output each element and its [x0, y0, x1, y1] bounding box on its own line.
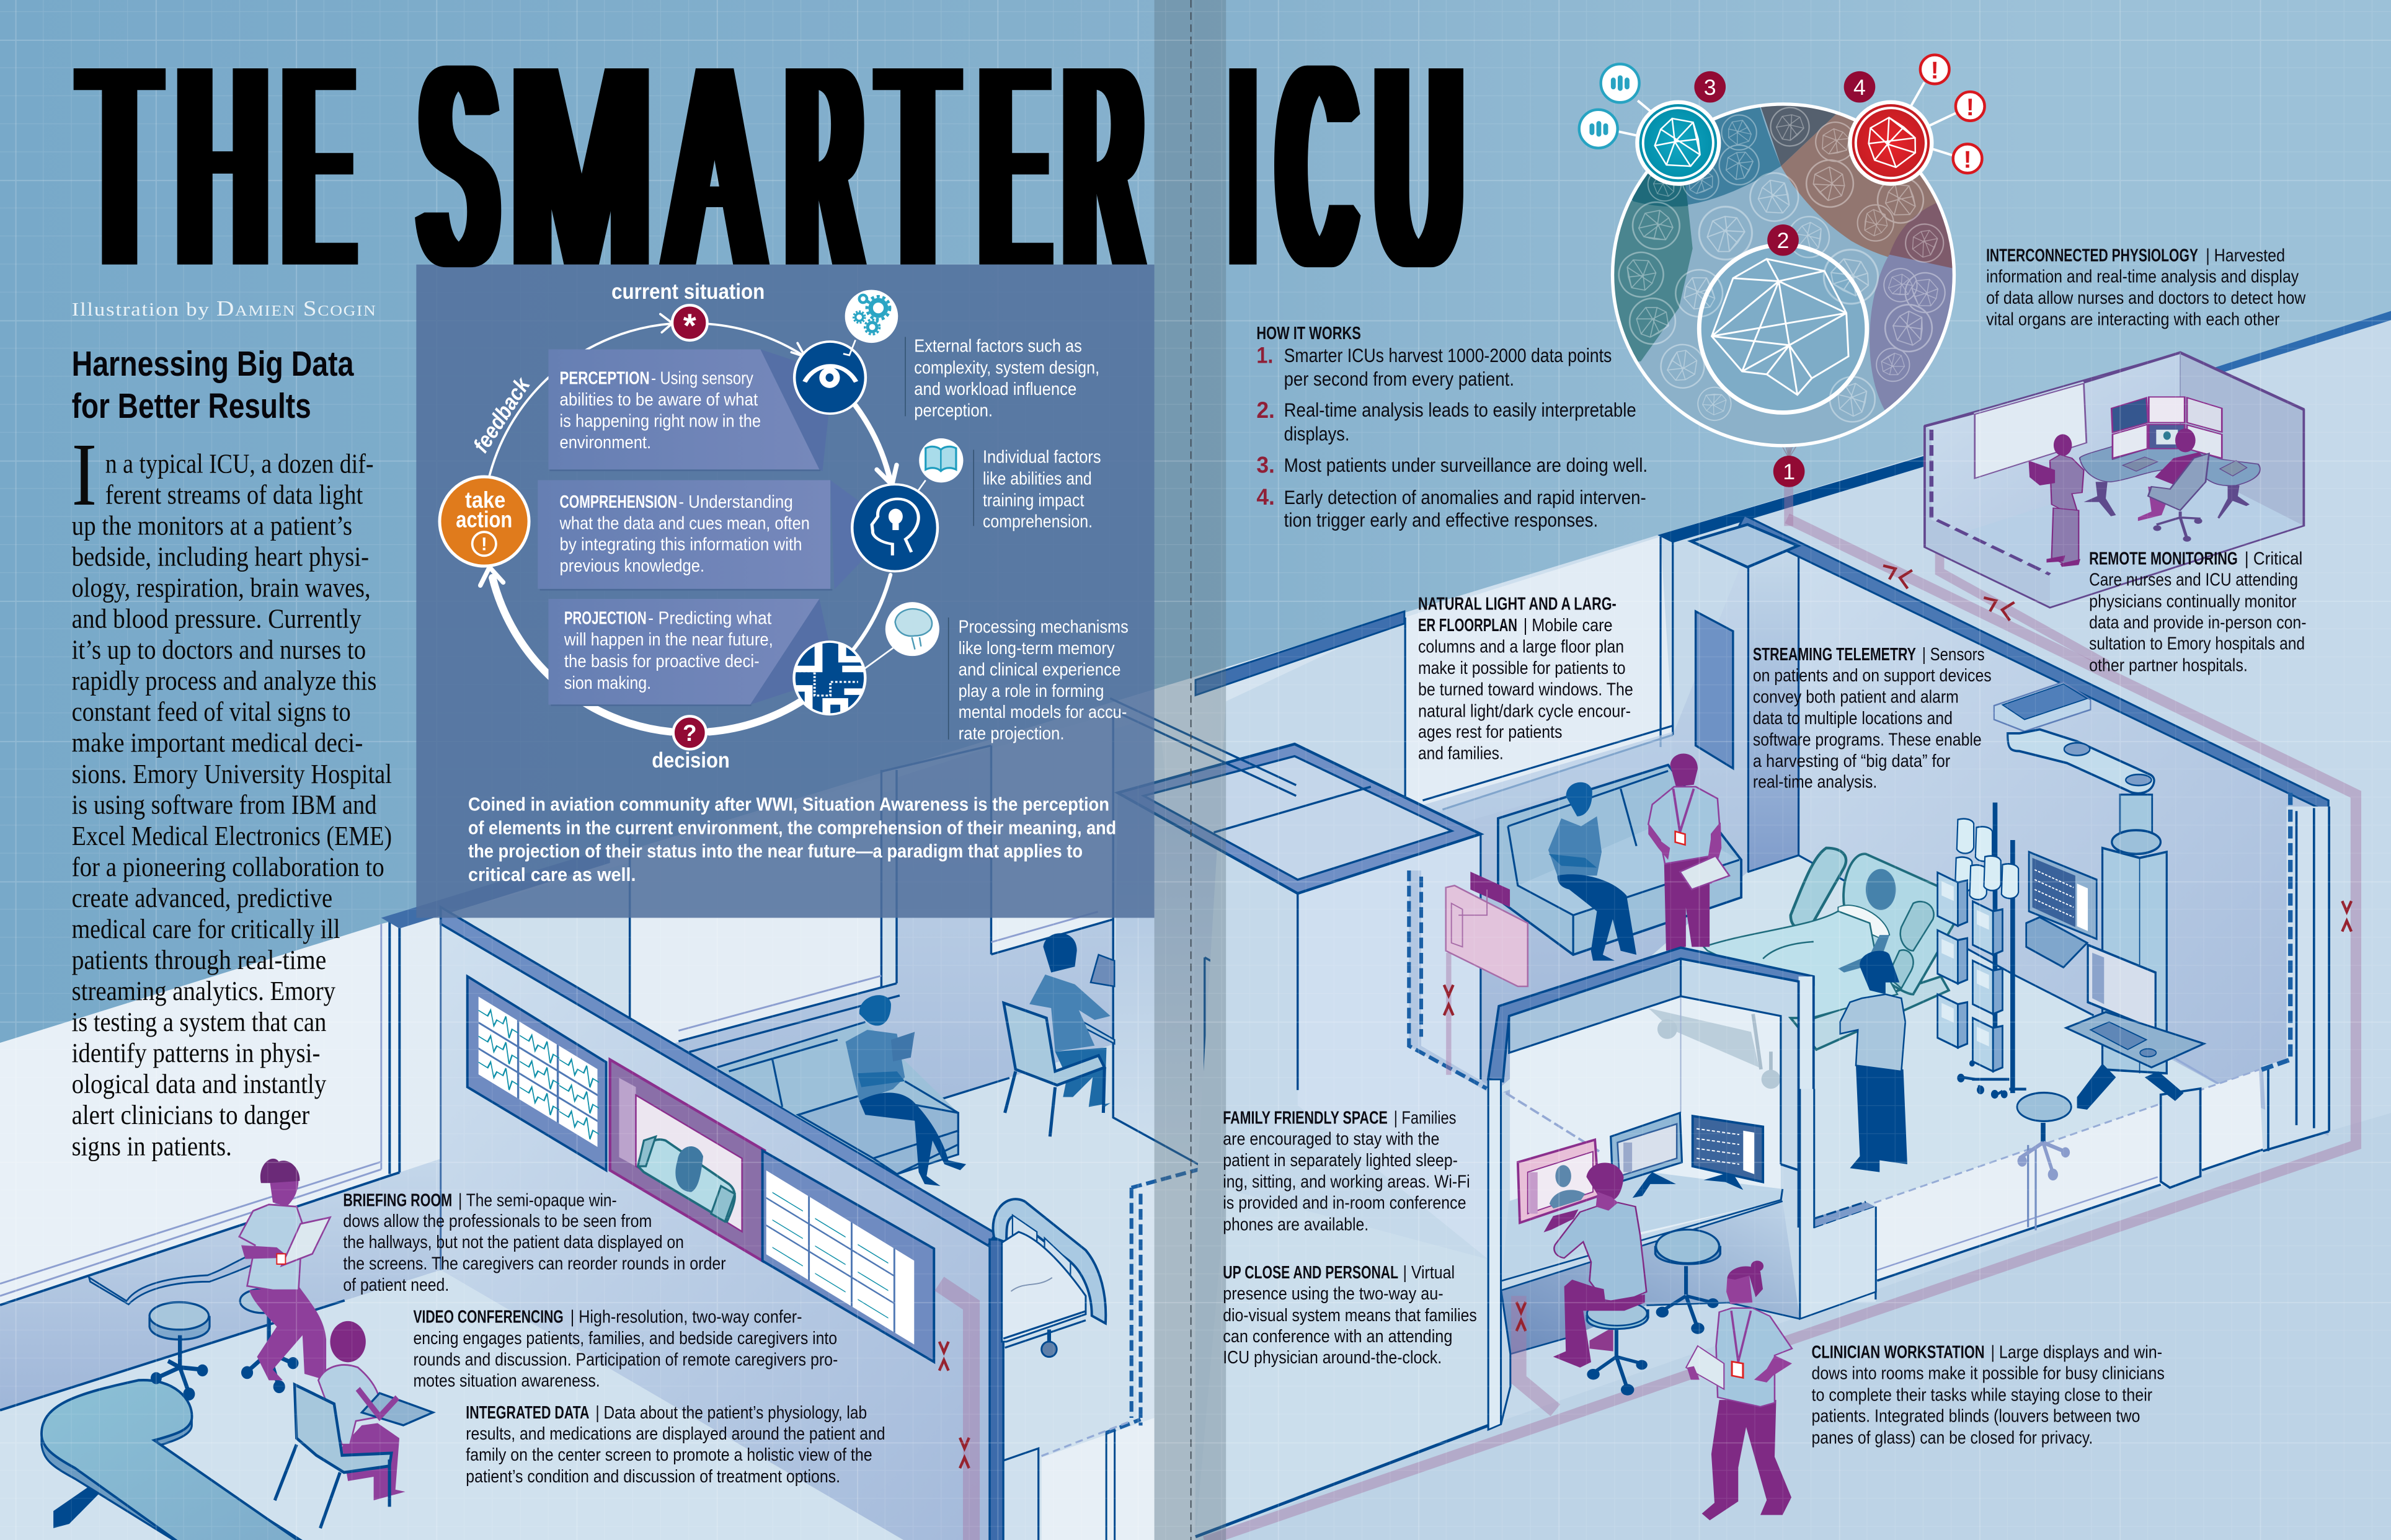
text: streaming telemetry: software programs. These enable — [1753, 730, 1982, 750]
circle regions — [1614, 105, 1953, 444]
connector lines — [1617, 82, 1956, 156]
how it works list: 4. — [1256, 484, 1275, 510]
data point clusters — [1613, 105, 1951, 431]
number badges: 2 — [1777, 228, 1789, 253]
text: natural light: make it possible for patients to — [1418, 658, 1625, 678]
text: processing mechanisms: and clinical experience — [959, 660, 1121, 679]
heading: harnessing big data: for Better Results — [72, 386, 311, 425]
text: streaming telemetry: STREAMING TELEMETRY — [1753, 645, 1916, 665]
text: streaming telemetry: convey both patient and alarm — [1753, 688, 1959, 707]
credit: Illustration by Damien Scogin — [72, 297, 376, 321]
text: up close and personal: ICU physician around-the-clock. — [1223, 1348, 1442, 1368]
text: clinician workstation: | Large displays and win- — [1990, 1342, 2162, 1362]
text: video conferencing — [413, 1307, 838, 1391]
title: S — [422, 7, 494, 325]
wall phone device — [1446, 872, 1528, 986]
text: U — [1378, 7, 1460, 325]
how it works list: per second from every patient. — [1284, 368, 1514, 390]
remote monitoring room — [1925, 353, 2304, 608]
article body text: medical care for critically ill — [72, 914, 340, 944]
text: projection: will happen in the near future, — [564, 630, 773, 650]
floor plane — [0, 314, 2391, 1540]
number badges: 3 — [1704, 75, 1716, 100]
text: perception: PERCEPTION — [560, 369, 650, 389]
box: projection — [549, 599, 828, 706]
family room working person with laptop — [1004, 933, 1114, 1136]
text: external factors: and workload influence — [914, 379, 1076, 399]
text: clinician workstation: panes of glass) can be closed for privacy. — [1812, 1428, 2093, 1448]
text: up close and personal: UP CLOSE AND PERSONAL — [1223, 1263, 1398, 1283]
IV pumps and poles — [1938, 802, 2026, 1099]
text: video conferencing: VIDEO CONFERENCING — [413, 1307, 564, 1327]
text: natural light: and families. — [1418, 744, 1504, 764]
article body text: ferent streams of data light — [105, 480, 363, 510]
text: processing mechanisms: play a role in forming — [959, 681, 1104, 701]
title: M — [512, 7, 650, 325]
text: situation awareness definition: the projection of their status into the near future—a paradigm that applies to — [468, 841, 1083, 862]
text: family friendly space: is provided and in-room conference — [1223, 1193, 1466, 1213]
text: streaming telemetry — [1753, 645, 1992, 792]
article body text — [72, 425, 392, 1161]
panel: situation awareness — [416, 265, 1155, 918]
text: streaming telemetry: data to multiple locations and — [1753, 709, 1953, 728]
how it works list: Smarter ICUs harvest 1000-2000 data points — [1284, 345, 1612, 366]
text: clinician workstation: to complete their tasks while staying close to their — [1812, 1385, 2153, 1405]
text: briefing room: the hallways, but not the patient data displayed on — [343, 1232, 684, 1252]
box: perception — [549, 350, 828, 471]
icon: gears — [845, 290, 898, 343]
text: integrated data: family on the center screen to promote a holistic view of the — [466, 1445, 872, 1465]
text: natural light: ages rest for patients — [1418, 722, 1562, 742]
screen: patient data — [763, 1151, 934, 1362]
text: external factors: perception. — [914, 400, 993, 420]
text: clinician workstation — [1812, 1342, 2165, 1448]
article body text: is using software from IBM and — [72, 790, 376, 820]
icon: alerts: ! — [1964, 146, 1972, 174]
text: comprehension: what the data and cues mean, often — [559, 513, 810, 533]
text: up close and personal: presence using the two-way au- — [1223, 1284, 1444, 1304]
how it works list: HOW IT WORKS — [1256, 324, 1361, 343]
icon: alerts: ! — [1966, 94, 1974, 121]
node: decision: ? — [683, 720, 697, 746]
text: video conferencing: rounds and discussion. Participation of remote caregivers pro- — [413, 1350, 838, 1370]
text: processing mechanisms — [959, 617, 1129, 744]
how it works list: tion trigger early and effective responses. — [1284, 510, 1598, 531]
text: integrated data: INTEGRATED DATA — [466, 1403, 589, 1423]
how it works list: 1. — [1256, 342, 1273, 368]
how it works list: Real-time analysis leads to easily interpretable — [1284, 399, 1636, 421]
heading: harnessing big data — [72, 344, 354, 425]
node 3 healthy patient — [1633, 98, 1723, 188]
text: situation awareness definition: critical care as well. — [468, 864, 636, 885]
text: remote monitoring: other partner hospitals. — [2089, 656, 2248, 676]
article body text: make important medical deci- — [72, 728, 363, 758]
node: take action: action — [456, 507, 512, 532]
node: take action — [440, 477, 529, 566]
text: natural light — [1418, 595, 1633, 764]
telemetry streams — [939, 476, 2356, 1540]
box: comprehension — [538, 480, 864, 590]
article body text: constant feed of vital signs to — [72, 697, 351, 727]
text: family friendly space: FAMILY FRIENDLY SPACE — [1223, 1108, 1388, 1128]
text: situation awareness definition: Coined in aviation community after WWI, Situation Awareness is the perception — [468, 794, 1109, 815]
text: comprehension: COMPREHENSION — [560, 492, 677, 512]
text: individual factors: comprehension. — [983, 511, 1093, 531]
text: perception: environment. — [560, 433, 651, 453]
text: external factors: External factors such as — [914, 336, 1082, 356]
text: natural light: natural light/dark cycle encour- — [1418, 701, 1631, 721]
how it works list: Most patients under surveillance are doing well. — [1284, 454, 1648, 476]
text: remote monitoring: REMOTE MONITORING — [2089, 549, 2238, 569]
text: clinician workstation: dows into rooms make it possible for busy clinicians — [1812, 1364, 2165, 1384]
text: comprehension: previous knowledge. — [560, 556, 704, 576]
cycle ring arrows — [481, 314, 897, 732]
text: individual factors: like abilities and — [983, 469, 1092, 489]
text: perception: - Using sensory — [651, 369, 753, 389]
text: up close and personal — [1223, 1263, 1477, 1368]
text: integrated data: patient’s condition and discussion of treatment options. — [466, 1467, 840, 1487]
title: T — [83, 7, 156, 325]
text: integrated data: | Data about the patient’s physiology, lab — [595, 1403, 867, 1423]
text: processing mechanisms: like long-term memory — [959, 639, 1115, 658]
text: projection: - Predicting what — [648, 609, 771, 629]
text: interconnected physiology: INTERCONNECTED PHYSIOLOGY — [1986, 246, 2198, 266]
icon: alerts: ! — [1931, 57, 1939, 84]
text: up close and personal: can conference with an attending — [1223, 1327, 1452, 1347]
text: processing mechanisms: Processing mechanisms — [959, 617, 1129, 637]
title: T — [882, 7, 954, 325]
text: up close and personal: dio-visual system means that families — [1223, 1306, 1477, 1325]
how it works list: 2. — [1256, 397, 1275, 423]
icon: book — [919, 438, 963, 482]
spine fold — [1155, 0, 1226, 1540]
title: A — [671, 7, 758, 325]
wall shelf and stools — [89, 1254, 298, 1401]
text: natural light: NATURAL LIGHT AND A LARG- — [1418, 595, 1617, 614]
text: external factors — [914, 336, 1099, 420]
text: family friendly space: ing, sitting, and working areas. Wi-Fi — [1223, 1172, 1470, 1192]
article body text: patients through real-time — [72, 945, 326, 975]
text: video conferencing: encing engages patients, families, and bedside caregivers into — [413, 1329, 837, 1348]
text: projection — [564, 609, 773, 693]
text: briefing room: dows allow the professionals to be seen from — [343, 1211, 652, 1231]
text: streaming telemetry: on patients and on support devices — [1753, 666, 1992, 686]
article body text: streaming analytics. Emory — [72, 976, 335, 1006]
nurse with clipboard — [239, 1159, 330, 1380]
stools and workstation user — [1543, 1162, 1720, 1396]
text: remote monitoring: physicians continually monitor — [2089, 591, 2297, 611]
text: perception — [560, 369, 761, 453]
node: take action: ! — [481, 534, 487, 555]
diagram: patient physiology network — [1579, 55, 1985, 487]
column and ceiling beams — [1110, 698, 1488, 1259]
text: interconnected physiology: vital organs are interacting with each other — [1986, 310, 2280, 330]
man with folder — [2029, 434, 2084, 567]
text: external factors: complexity, system design, — [914, 358, 1099, 378]
text: perception: abilities to be aware of what — [560, 390, 758, 410]
title: R — [1067, 7, 1140, 325]
bed in corridor behind partition — [993, 1199, 1106, 1357]
labels: cycle stages: feedback — [468, 372, 535, 457]
patient bed — [1704, 848, 1957, 1050]
text: remote monitoring: Care nurses and ICU attending — [2089, 570, 2298, 590]
ceiling boom and monitor tower — [1994, 682, 2204, 1180]
text: individual factors: Individual factors — [983, 448, 1101, 467]
article body text: up the monitors at a patient’s — [72, 510, 352, 541]
heading: harnessing big data: Harnessing Big Data — [72, 344, 354, 383]
how it works list — [1256, 324, 1648, 531]
title: C — [1281, 7, 1352, 325]
text: remote monitoring: sultation to Emory hospitals and — [2089, 634, 2305, 654]
how it works list: 3. — [1256, 452, 1275, 477]
text: natural light: ER FLOORPLAN — [1418, 616, 1517, 635]
node: current situation: * — [683, 307, 696, 344]
text: situation awareness definition — [468, 794, 1116, 885]
labels: cycle stages — [468, 279, 765, 772]
central network — [1712, 259, 1848, 395]
workstation monitors — [1518, 1113, 1763, 1223]
nurse at bedside — [1840, 951, 1907, 1172]
number badges: 1 — [1783, 459, 1795, 484]
text: processing mechanisms: rate projection. — [959, 724, 1065, 744]
text: video conferencing: motes situation awareness. — [413, 1371, 600, 1391]
text: situation awareness definition: of elements in the current environment, the comprehension of their meaning, and — [468, 818, 1116, 839]
title: R — [790, 7, 859, 325]
node: eye — [794, 342, 866, 414]
text: family friendly space — [1223, 1108, 1470, 1235]
text: briefing room: BRIEFING ROOM — [343, 1191, 452, 1211]
text: streaming telemetry: | Sensors — [1922, 645, 1985, 665]
text: interconnected physiology: of data allow nurses and doctors to detect how — [1986, 288, 2306, 308]
meeting table — [42, 1380, 313, 1540]
screen: vital signs grid — [468, 976, 606, 1170]
text: briefing room: the screens. The caregivers can reorder rounds in order — [343, 1254, 726, 1274]
text: projection: the basis for proactive deci- — [564, 652, 760, 671]
article body text: ological data and instantly — [72, 1069, 326, 1099]
text: natural light: | Mobile care — [1524, 616, 1613, 635]
text: briefing room: of patient need. — [343, 1275, 449, 1295]
article body text: n a typical ICU, a dozen dif- — [105, 448, 374, 479]
article body text: identify patterns in physi- — [72, 1038, 320, 1068]
article body text: create advanced, predictive — [72, 883, 332, 913]
text: family friendly space: | Families — [1394, 1108, 1457, 1128]
text: video conferencing: | High-resolution, two-way confer- — [570, 1307, 802, 1327]
text: integrated data: results, and medications are displayed around the patient and — [466, 1424, 885, 1444]
clinician workstation booth — [1488, 947, 1876, 1302]
icon: normal readings — [1579, 64, 1639, 148]
sofa, seated relative and doctor — [1446, 753, 1741, 986]
node: decision — [673, 716, 706, 749]
monitor wall — [2111, 397, 2222, 458]
connector arrows — [843, 337, 974, 740]
telemetry under desk — [1519, 1296, 1555, 1410]
text: comprehension: - Understanding — [678, 492, 793, 512]
right wall and outer architecture — [1196, 311, 2391, 1540]
workstation desk and lower cabinet — [1488, 1079, 1876, 1430]
article body text: it’s up to doctors and nurses to — [72, 635, 366, 665]
number badges: 4 — [1853, 75, 1866, 100]
red flow chevrons — [939, 565, 2351, 1468]
text: projection: sion making. — [564, 673, 651, 693]
text: individual factors — [983, 448, 1101, 531]
article body text: rapidly process and analyze this — [72, 666, 376, 696]
text: up close and personal: | Virtual — [1403, 1263, 1455, 1283]
text: natural light: be turned toward windows. The — [1418, 679, 1633, 699]
text: streaming telemetry: real-time analysis. — [1753, 772, 1877, 792]
text: family friendly space: patient in separately lighted sleep- — [1223, 1151, 1458, 1170]
text: streaming telemetry: a harvesting of “big data” for — [1753, 751, 1951, 771]
text: family friendly space: are encouraged to stay with the — [1223, 1130, 1439, 1149]
text: interconnected physiology: | Harvested — [2206, 246, 2285, 266]
dashed glass wall and lower panes — [1003, 1168, 1205, 1540]
text: remote monitoring: | Critical — [2245, 549, 2302, 569]
node: take action: take — [465, 487, 505, 513]
icon: brain — [885, 602, 939, 656]
title — [83, 7, 1460, 325]
text: individual factors: training impact — [983, 490, 1085, 510]
labels: cycle stages: current situation — [611, 279, 765, 304]
screen: video conference — [610, 1060, 765, 1261]
article body text: is testing a system that can — [72, 1007, 326, 1037]
family room sofa and reader — [717, 995, 966, 1186]
article body text: for a pioneering collaboration to — [72, 852, 384, 882]
text: natural light: columns and a large floor plan — [1418, 637, 1624, 657]
text: clinician workstation: CLINICIAN WORKSTATION — [1812, 1342, 1985, 1362]
text: integrated data — [466, 1403, 885, 1487]
article body text: Excel Medical Electronics (EME) — [72, 821, 392, 851]
title: E — [984, 7, 1045, 325]
icon: alerts — [1920, 55, 1985, 174]
article body text: signs in patients. — [72, 1131, 232, 1161]
title: H — [179, 7, 266, 325]
text: comprehension: by integrating this information with — [560, 535, 802, 555]
seated clinician at tablet chair — [275, 1321, 433, 1528]
text: processing mechanisms: mental models for accu- — [959, 702, 1127, 722]
article body text: and blood pressure. Currently — [72, 603, 362, 634]
text: remote monitoring: data and provide in-person con- — [2089, 613, 2306, 633]
how it works list: displays. — [1284, 423, 1349, 445]
article body text: sions. Emory University Hospital — [72, 759, 392, 789]
article body text: bedside, including heart physi- — [72, 541, 369, 572]
text: clinician workstation: patients. Integrated blinds (louvers between two — [1812, 1407, 2140, 1427]
node 4 anomalous patient — [1846, 98, 1936, 188]
briefing room and family room architecture — [0, 714, 1298, 1540]
labels: cycle stages: decision — [652, 748, 730, 772]
node: head — [852, 484, 938, 571]
clinician with clipboard — [1686, 1261, 1792, 1520]
text: family friendly space: phones are available. — [1223, 1215, 1369, 1235]
article body text: I — [72, 425, 97, 524]
text: briefing room — [343, 1191, 726, 1295]
partition wall with screens — [441, 907, 1003, 1540]
article body text: ology, respiration, brain waves, — [72, 573, 371, 603]
node: current situation — [672, 305, 708, 344]
text: interconnected physiology — [1986, 246, 2306, 330]
article body text: alert clinicians to danger — [72, 1100, 309, 1130]
text: comprehension — [559, 492, 810, 576]
text: projection: PROJECTION — [564, 609, 647, 629]
text: remote monitoring — [2089, 549, 2306, 676]
node: maze — [794, 640, 872, 718]
title: E — [286, 7, 350, 325]
text: interconnected physiology: information and real-time analysis and display — [1986, 267, 2299, 287]
seated woman in office chair — [2138, 428, 2209, 542]
number badges — [1694, 71, 1875, 487]
text: perception: is happening right now in the — [560, 412, 761, 431]
how it works list: Early detection of anomalies and rapid interven- — [1284, 487, 1646, 508]
title: I — [1238, 7, 1248, 325]
text: briefing room: | The semi-opaque win- — [458, 1191, 617, 1211]
standing doctor — [1648, 753, 1729, 951]
